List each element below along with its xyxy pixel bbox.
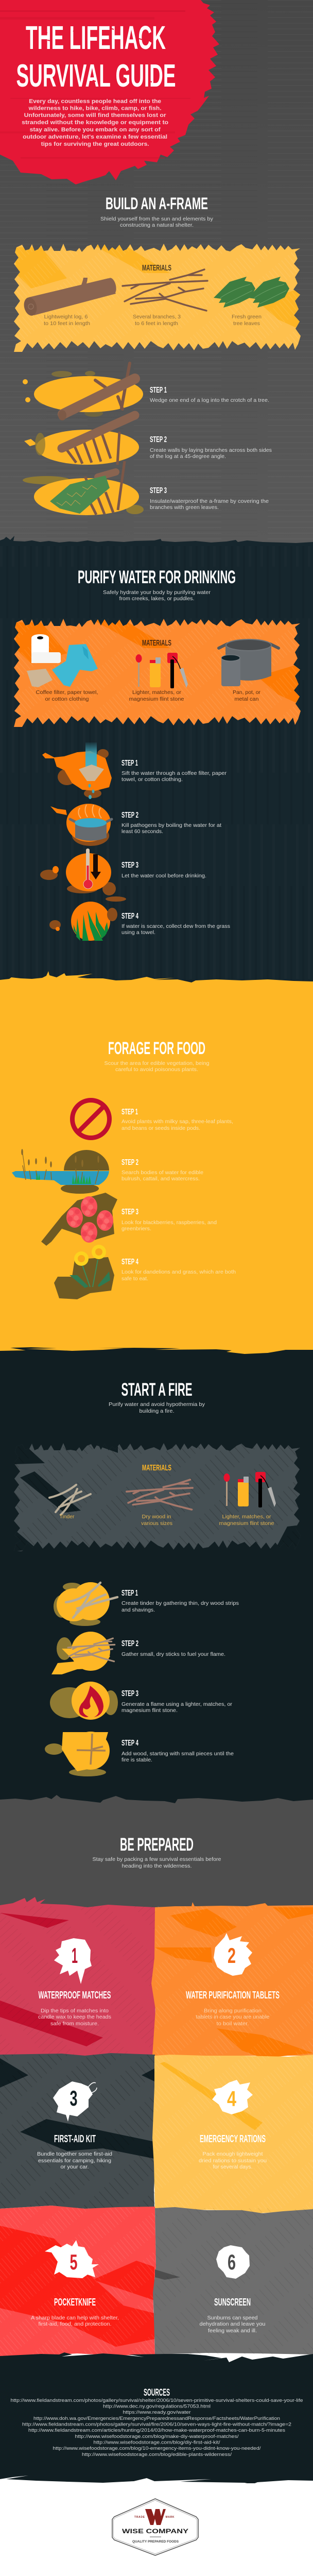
sources list: http://www.fieldandstream.com/photos/gallery/survival/shelter/2006/10/seven-primitive-survival-shelters-could-save-your-life [10,2397,303,2403]
description: candle wax to keep the heads [38,2014,111,2020]
description: safe from moisture. [50,2021,99,2027]
title: SURVIVAL GUIDE [16,58,176,94]
material captions: metal can [235,697,259,702]
background: gray shelter section [0,0,313,551]
sources list: http://www.wisefoodstorage.com/blog/make-diy-waterproof-matches/ [75,2433,239,2439]
sources list: http://www.fieldandstream.com/articles/hunting/2014/03/how-make-waterproof-matches-can-burn-5-minutes [28,2427,285,2433]
purify step 2 icon [50,804,112,846]
be prepared intro text: Stay safe by packing a few survival essentials before [93,1857,221,1862]
a-frame intro text: Shield yourself from the sun and elements by [100,216,214,222]
materials label: MATERIALS [142,264,171,273]
number badge 6 [216,2245,250,2279]
heading: start a fire: START A FIRE [121,1380,193,1400]
material captions: magnesium flint stone [219,1521,274,1527]
description: Sunburns can speed [207,2315,258,2321]
description: for several days. [213,2164,252,2170]
intro paragraph: wilderness to hike, bike, climb, camp, or fish. [28,105,162,111]
purify step 2 text: least 60 seconds. [121,829,163,835]
purify step 2 text: STEP 2 [121,811,138,820]
purify intro text: from creeks, lakes, or puddles. [119,596,195,602]
fire step 1 text [121,1589,239,1613]
logo text: MARK [166,2516,175,2519]
sources list: http://www.fieldandstream.com/photos/gallery/survival/fire/2006/10/seven-ways-light-fire-without-match/?image=2 [22,2421,291,2427]
fire step 4 text: fire is stable. [121,1757,152,1763]
be prepared intro text: heading into the wilderness. [121,1863,192,1869]
forage step 4 text: STEP 4 [121,1258,138,1266]
panel: a-frame materials [14,243,301,352]
material captions [44,314,262,327]
forage step 3 text: greenbriers. [121,1226,151,1232]
fire step 1 icon [54,1582,117,1626]
a-frame intro text [100,216,214,228]
material captions: to 6 feet in length [135,321,178,327]
description: tablets in case you are unable [196,2014,270,2020]
purify step 4 text: If water is scarce, collect dew from the grass [121,924,230,929]
purify step 2 text: Kill pathogens by boiling the water for at [121,823,221,828]
intro paragraph: stay alive. Before you embark on any sort of [30,127,161,133]
material captions: Tinder [60,1514,75,1520]
description: feeling weak and ill. [208,2328,257,2334]
fire step 1 text: Create tinder by gathering thin, dry wood strips [121,1601,239,1606]
sources list [10,2397,303,2457]
number badge 1 [54,1938,92,1984]
be prepared intro text [93,1857,221,1869]
forage step 1 text: and beans or seeds inside pods. [121,1126,200,1131]
sources heading: SOURCES [144,2387,170,2398]
purify step 1 text: STEP 1 [121,759,138,768]
background: dark water section [0,536,313,984]
background: gray prepared section [0,1795,313,1917]
title: EMERGENCY RATIONS [200,2133,266,2145]
number badge 1: 1 [72,1943,78,1968]
fire step 4 text: Add wood, starting with small pieces until the [121,1751,234,1757]
description: or your car. [61,2164,89,2170]
materials label: MATERIALS [142,1464,171,1472]
panel: purify materials [14,618,301,727]
number badge 2 [214,1933,252,1976]
panel: emergency rations [152,2055,313,2213]
forage step 3 text: STEP 3 [121,1208,138,1216]
heading: forage for food: FORAGE FOR FOOD [108,1039,205,1058]
description: Bundle together some first-aid [37,2151,112,2157]
title [16,19,176,94]
a-frame step 2 icon [24,415,139,465]
description [38,2008,111,2027]
description [31,2315,119,2327]
fire intro text [109,1402,205,1414]
purify intro text: Safely hydrate your body by purifying water [103,590,211,596]
title: SUNSCREEN [214,2297,251,2308]
material captions: tree leaves [233,321,260,327]
intro paragraph: stranded without the knowledge or equipment to [22,120,168,126]
purify step 1 text: Sift the water through a coffee filter, paper [121,771,227,776]
title: FIRST-AID KIT [54,2133,96,2145]
forage intro text: careful to avoid poisonous plants. [115,1067,198,1073]
panel: sunscreen [153,2207,313,2354]
forage step 2 text: bulrush, cattail, and watercress. [121,1176,200,1182]
fire intro text: building a fire. [139,1409,174,1414]
a-frame step 2 text: Create walls by laying branches across both sides [150,448,272,453]
description: dehydration and leave you [200,2321,266,2327]
forage step 4 text: Look for dandelions and grass, which are both [121,1269,236,1275]
purify step 1 text [121,759,227,783]
icon: branches [123,269,207,311]
a-frame step 3 icon [23,461,144,515]
purify intro text [103,590,211,602]
panel: pocketknife [0,2206,156,2357]
number badge 5: 5 [70,2250,77,2274]
background: dark sources section [0,2352,313,2483]
forage step 1 text [121,1108,233,1131]
material captions: Lighter, matches, or [222,1514,271,1520]
icon: tinder [49,1485,91,1515]
fire step 2 text: STEP 2 [121,1639,138,1648]
purify step 4 text: using a towel. [121,930,155,936]
sources list: http://www.dec.ny.gov/regulations/57053.html [103,2403,211,2409]
material captions: Lighter, matches, or [132,690,182,696]
description [37,2151,112,2170]
forage intro text: Scour the area for edible vegetation, being [104,1061,210,1066]
material captions: to 10 feet in length [44,321,90,327]
icon: pot and can [219,639,279,686]
description: to boil water. [216,2021,249,2027]
description: essentials for camping, hiking [38,2158,111,2164]
material captions: various sizes [141,1521,172,1527]
panel: water purification tablets [151,1902,313,2058]
forage step 2 icon: pond and reeds [12,1149,109,1194]
material captions: Coffee filter, paper towel, [36,690,98,696]
intro paragraph: Unfortunately, some will find themselves lost or [24,112,166,118]
fire step 3 text: Generate a flame using a lighter, matches, or [121,1702,233,1707]
material captions: Dry wood in [142,1514,171,1520]
fire step 1 text: and shavings. [121,1607,155,1613]
purify step 1 text: towel, or cotton clothing. [121,777,183,783]
forage step 1 text: Avoid plants with milky sap, three-leaf plants, [121,1119,233,1125]
description: Pack enough lightweight [203,2151,263,2157]
a-frame step 3 text: branches with green leaves. [150,505,219,511]
fire step 4 text: STEP 4 [121,1739,138,1748]
fire step 4 icon: crossed sticks [45,1732,110,1776]
sources list: http://www.wisefoodstorage.com/blog/edible-plants-wilderness/ [82,2451,232,2457]
purify step 4 icon [49,896,126,941]
purify step 3 text [121,861,206,879]
purify step 4 text [121,912,230,936]
materials label: MATERIALS [142,639,171,648]
a-frame step 1 icon [23,363,143,420]
description [200,2315,266,2334]
forage step 2 text: STEP 2 [121,1158,138,1167]
forage step 4 text [121,1258,236,1282]
fire step 4 text [121,1739,234,1763]
description [199,2151,267,2170]
purify step 3 icon [40,849,116,895]
title: POCKETKNIFE [54,2297,96,2308]
a-frame step 1 text [150,386,269,403]
forage step 3 text [121,1208,217,1232]
intro paragraph: tips for surviving the great outdoors. [41,141,149,147]
intro paragraph: Every day, countless people head off into the [29,98,161,105]
logo: wise company [112,2499,198,2555]
fire step 3 text: STEP 3 [121,1689,138,1698]
forage step 4 icon: dandelions [54,1245,114,1299]
a-frame step 3 text: Insulate/waterproof the a-frame by covering the [150,499,269,504]
panel: first-aid kit [0,2053,156,2209]
intro paragraph: outdoor adventure, let's examine a few essential [23,134,167,140]
description: A sharp blade can help with shelter, [31,2315,119,2321]
material captions: magnesium flint stone [129,697,184,702]
a-frame step 2 text: of the log at a 45-degree angle. [150,454,226,460]
number badge 2: 2 [228,1943,236,1968]
fire intro text: Purify water and avoid hypothermia by [109,1402,205,1408]
number badge 5 [45,2240,99,2278]
description [196,2008,270,2027]
panel: waterproof matches [0,1897,155,2056]
logo W mark [145,2509,166,2525]
background: dark fire section [0,1347,313,1803]
logo text: TRADE [134,2516,145,2519]
number badge 3 [53,2081,97,2122]
material captions: or cotton clothing [45,697,89,702]
a-frame step 1 text: STEP 1 [150,386,167,395]
icon: leaves [214,277,289,308]
material captions: Lightweight log, 6 [44,314,88,320]
number badge 4 [212,2080,253,2114]
icon: dry wood [127,1480,193,1510]
forage step 3 text: Look for blackberries, raspberries, and [121,1220,217,1226]
material captions: Fresh green [232,314,262,320]
forage intro text [104,1061,210,1073]
a-frame step 1 text: Wedge one end of a log into the crotch of a tree. [150,398,269,403]
logo text [122,2516,188,2544]
a-frame step 3 text [150,486,269,511]
icon: match, lighter, flint [223,1472,276,1507]
heading: build an a-frame: BUILD AN A-FRAME [106,194,208,213]
description: Dip the tips of matches into [41,2008,109,2014]
purify step 3 text: STEP 3 [121,861,138,870]
title: THE LIFEHACK [26,19,166,56]
title: WATERPROOF MATCHES [38,1990,111,2001]
material captions [36,690,261,702]
number badge 6: 6 [228,2250,236,2274]
a-frame step 2 text: STEP 2 [150,435,167,444]
fire step 3 text [121,1689,233,1714]
material captions: Several branches, 3 [133,314,181,320]
sources list: https://www.ready.gov/water [123,2409,190,2415]
forage step 1 text: STEP 1 [121,1108,138,1116]
purify step 3 text: Let the water cool before drinking. [121,873,206,879]
forage step 1 icon: prohibition sign [72,1100,109,1138]
material captions [60,1514,274,1527]
fire step 2 icon [51,1632,115,1674]
a-frame step 2 text [150,435,272,460]
purify step 4 text: STEP 4 [121,912,138,921]
forage step 2 text: Search bodies of water for edible [121,1170,203,1176]
icon: match, lighter, flint [136,653,188,688]
heading: be prepared: BE PREPARED [120,1835,194,1855]
purify step 1 icon [42,742,112,799]
intro paragraph [22,98,168,147]
description: first-aid, food, and protection. [38,2321,111,2327]
fire step 2 text [121,1639,225,1657]
sources list: http://www.wisefoodstorage.com/blog/10-emergency-items-you-didnt-know-you-needed/ [53,2445,261,2451]
fire step 3 text: magnesium flint stone. [121,1708,178,1714]
icon: paper towel, shirt and coffee filter [27,634,98,687]
panel: fire materials [14,1443,301,1552]
fire step 3 icon: flame [50,1682,118,1720]
description: Bring along purification [204,2008,262,2014]
icon: log [22,277,118,317]
forage step 2 text [121,1158,203,1182]
number badge 4: 4 [227,2087,236,2111]
a-frame intro text: constructing a natural shelter. [120,223,194,228]
number badge 3: 3 [70,2086,77,2110]
logo text: QUALITY PREPARED FOODS [132,2540,179,2544]
material captions: Pan, pot, or [233,690,261,696]
fire step 1 text: STEP 1 [121,1589,138,1598]
description: dried rations to sustain you [199,2158,267,2164]
footer white background [0,2476,313,2576]
forage step 3 icon: berries [41,1193,117,1246]
sources list: http://www.wisefoodstorage.com/blog/diy-first-aid-kit/ [94,2439,220,2445]
fire step 2 text: Gather small, dry sticks to fuel your flame. [121,1652,225,1657]
sources list: http://www.doh.wa.gov/Emergencies/EmergencyPreparednessandResponse/Factsheets/WaterPurification [33,2415,280,2421]
background: yellow forage section [0,971,313,1355]
a-frame step 3 text: STEP 3 [150,486,167,495]
purify step 2 text [121,811,221,835]
logo text: WISE COMPANY [122,2529,188,2535]
forage step 4 text: safe to eat. [121,1276,148,1282]
header red paint splatter [0,0,219,184]
